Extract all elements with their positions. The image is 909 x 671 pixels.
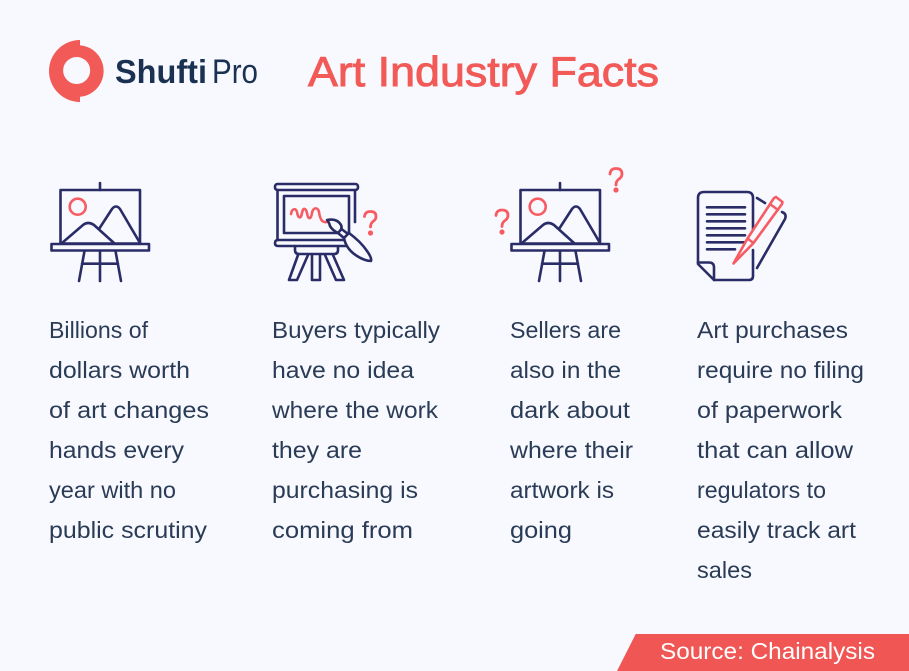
- source banner: [617, 634, 909, 671]
- text block: sellers: [509, 317, 633, 543]
- text block: buyers: have no idea: [272, 357, 414, 383]
- logo wordmark: Shufti: [115, 53, 207, 90]
- text block: sellers: also in the: [510, 357, 621, 383]
- text block: billions of dollars: of art changes: [49, 397, 209, 423]
- logo ring: [49, 40, 104, 102]
- icon: easel with paintbrush: [275, 184, 376, 280]
- pen: [734, 197, 782, 264]
- text block: sellers: artwork is: [510, 477, 614, 503]
- text block: art purchases: sales: [697, 557, 752, 583]
- text block: art purchases: require no filing: [697, 357, 864, 383]
- squiggle: [291, 208, 327, 222]
- text block: buyers: [271, 317, 441, 543]
- logo: Shufti Pro: [49, 40, 258, 102]
- text block: billions of dollars: [49, 317, 209, 543]
- text block: billions of dollars: year with no: [49, 477, 176, 503]
- text block: art purchases: [697, 317, 864, 583]
- text block: billions of dollars: dollars worth: [49, 357, 190, 383]
- text block: buyers: coming from: [272, 517, 413, 543]
- text block: art purchases: easily track art: [697, 517, 857, 543]
- text block: art purchases: that can allow: [697, 437, 853, 463]
- text block: sellers: Sellers are: [510, 317, 621, 343]
- text block: buyers: Buyers typically: [272, 317, 441, 343]
- icon: easel with question marks: [496, 168, 622, 281]
- source banner: Source: Chainalysis: [660, 638, 875, 664]
- text block: billions of dollars: public scrutiny: [49, 517, 208, 543]
- text block: billions of dollars: hands every: [49, 437, 185, 463]
- text block: art purchases: of paperwork: [697, 397, 843, 423]
- question mark: [364, 212, 376, 227]
- brush: [327, 220, 342, 233]
- text block: buyers: purchasing is: [272, 477, 418, 503]
- logo wordmark: Pro: [212, 53, 258, 91]
- icon: document and pen: [698, 192, 786, 280]
- text block: art purchases: regulators to: [697, 477, 826, 503]
- title: Art Industry Facts: [308, 48, 659, 95]
- text block: sellers: where their: [509, 437, 633, 463]
- icon: easel with landscape: [52, 183, 149, 281]
- text block: sellers: dark about: [510, 397, 631, 423]
- text block: art purchases: Art purchases: [697, 317, 848, 343]
- text block: buyers: where the work: [271, 397, 439, 423]
- text block: billions of dollars: Billions of: [49, 317, 149, 343]
- text block: sellers: going: [510, 517, 572, 543]
- text block: buyers: they are: [272, 437, 362, 463]
